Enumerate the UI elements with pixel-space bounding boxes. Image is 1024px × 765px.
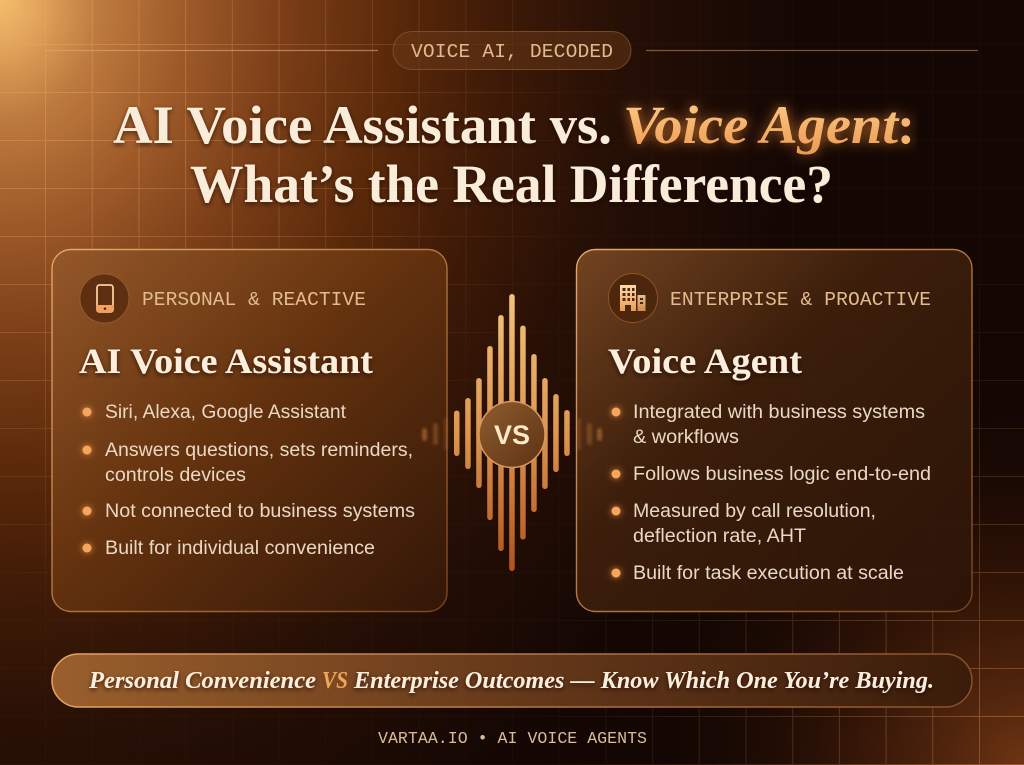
bullet list: Integrated with business systems (633, 402, 925, 423)
bullet list: Built for individual convenience (105, 538, 375, 559)
takeaway banner: VS (322, 668, 348, 694)
takeaway banner (52, 654, 972, 707)
icon: smartphone (80, 274, 129, 323)
card label: ENTERPRISE & PROACTIVE (670, 289, 931, 311)
card heading: Voice Agent (608, 341, 802, 381)
bullet list: Built for task execution at scale (633, 563, 904, 584)
bullet list: deflection rate, AHT (633, 526, 806, 547)
eyebrow pill (393, 32, 631, 70)
title: Voice Agent (623, 95, 900, 155)
title: : (897, 95, 915, 155)
footer brand line: VARTAA.IO • AI VOICE AGENTS (378, 729, 647, 748)
header rule: right (646, 50, 978, 52)
bullet list: Siri, Alexa, Google Assistant (105, 402, 347, 423)
faded wave: left (422, 418, 448, 450)
bullet list: Follows business logic end-to-end (633, 464, 931, 485)
VS badge: VS (494, 420, 530, 450)
panel: AI Voice Assistant (52, 250, 447, 612)
title (113, 95, 915, 214)
takeaway banner: Enterprise Outcomes — Know Which One You’re Buying. (353, 668, 934, 694)
bullet list: Not connected to business systems (105, 501, 415, 522)
bullet list: controls devices (105, 465, 246, 486)
icon: office building (608, 274, 658, 322)
header rule: left (45, 50, 378, 52)
bullet list (612, 402, 931, 584)
waveform with VS badge (422, 294, 602, 571)
waveform bars (454, 294, 570, 571)
bullet list: Measured by call resolution, (633, 501, 876, 522)
panel: Voice Agent (576, 250, 972, 612)
eyebrow pill: VOICE AI, DECODED (411, 41, 613, 63)
bullet list: & workflows (633, 427, 739, 448)
title: AI Voice Assistant vs. (113, 95, 612, 155)
card heading: AI Voice Assistant (79, 341, 373, 381)
faded wave: right (577, 418, 602, 450)
bullet list: Answers questions, sets reminders, (105, 440, 413, 461)
bullet list (82, 402, 415, 559)
takeaway banner: Personal Convenience (88, 668, 316, 694)
title: What’s the Real Difference? (190, 154, 833, 214)
VS badge (479, 402, 545, 468)
card label: PERSONAL & REACTIVE (142, 289, 366, 311)
